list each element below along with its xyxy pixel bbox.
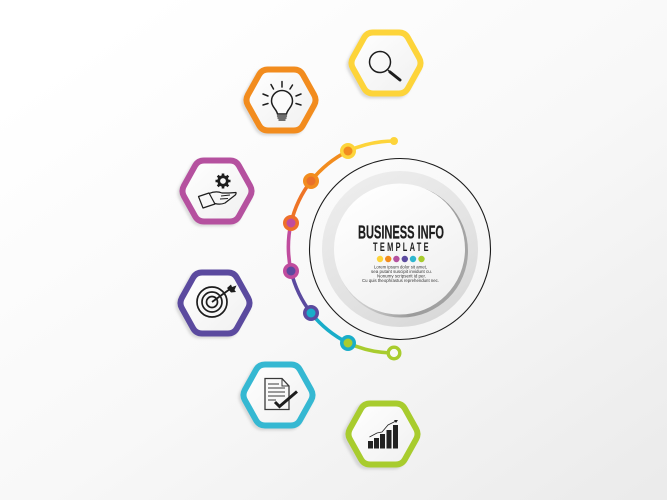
timeline nodes <box>283 137 400 359</box>
node 1 <box>340 143 356 159</box>
icon: light bulb <box>263 82 301 120</box>
body text: Lorem ipsum dolor sit amet, <box>374 265 427 270</box>
body text: Cu quis theophrastus reprehendunt nec. <box>362 278 439 283</box>
node 2 <box>303 173 319 189</box>
node 6 <box>340 335 356 351</box>
end ring <box>388 347 400 359</box>
arc segment: dark orange <box>291 181 311 223</box>
subheading: TEMPLATE <box>373 241 431 255</box>
body text: Nonumy scripserit id per. <box>377 274 426 279</box>
icon: document with check <box>265 378 297 410</box>
arc segment: magenta <box>288 223 291 271</box>
arc segment: orange <box>311 151 348 181</box>
hexagon: target <box>178 272 250 336</box>
heading: BUSINESS INFO <box>358 222 444 242</box>
central circle group <box>310 158 490 340</box>
hexagon: search <box>349 32 421 96</box>
node 5 <box>303 305 319 321</box>
body text <box>362 265 439 283</box>
icon: magnifier <box>370 52 400 80</box>
disc shadow <box>335 184 468 318</box>
grey ring <box>322 171 478 327</box>
white disc <box>334 184 465 314</box>
arc segment: cyan <box>311 313 348 343</box>
arc segment: indigo <box>291 271 311 313</box>
node 3 <box>283 215 299 231</box>
hexagon: document <box>241 364 313 428</box>
icon: target with arrow <box>197 284 236 317</box>
body text: sea putant suscipit invidunt cu. <box>371 269 432 274</box>
arc segment: yellow <box>348 141 394 151</box>
colour dots <box>377 256 425 262</box>
end dot <box>390 137 398 145</box>
hexagon: growth chart <box>345 404 418 466</box>
hexagon: idea <box>244 70 316 132</box>
arc segment: green <box>348 343 394 353</box>
timeline arc <box>288 141 394 353</box>
hexagon: service <box>180 160 252 224</box>
icon: hand with gear <box>198 174 236 208</box>
icon: bar chart <box>368 420 398 448</box>
node 4 <box>283 263 299 279</box>
thin outer circle <box>310 158 490 340</box>
